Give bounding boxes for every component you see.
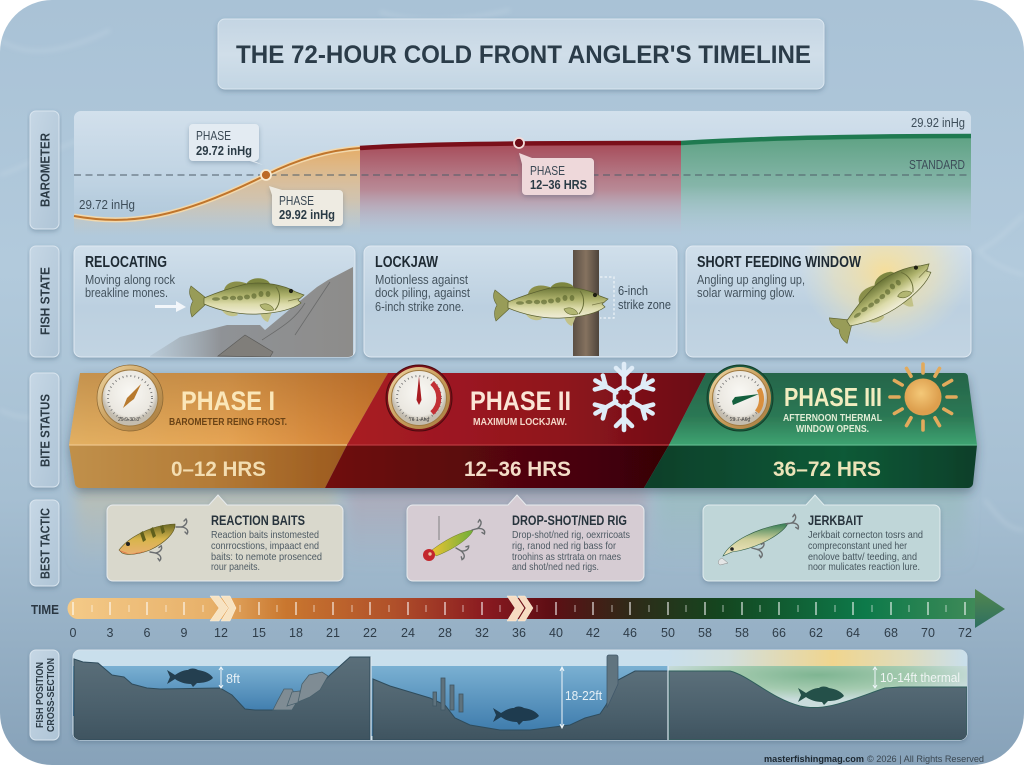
time label: TIME bbox=[31, 602, 59, 617]
title: THE 72-HOUR COLD FRONT ANGLER'S TIMELINE bbox=[236, 41, 811, 69]
text block: Angling up angling up, bbox=[697, 272, 805, 287]
text block: troohins as strtrata on rnaes bbox=[512, 551, 621, 563]
duration: phase III: 36–72 HRS bbox=[773, 458, 881, 481]
icon: snowflake bbox=[591, 364, 657, 430]
subtitle: phase III: WINDOW OPENS. bbox=[796, 423, 869, 435]
gauge: phase II bbox=[386, 365, 452, 431]
row label: bite status bbox=[30, 373, 59, 487]
row label: fish state bbox=[30, 246, 59, 357]
segment: phase II bbox=[325, 373, 706, 488]
row label: fish position cross-section bbox=[30, 650, 59, 740]
text block: 6-inch strike zone. bbox=[375, 299, 464, 314]
start reading: 29.72 inHg bbox=[79, 197, 135, 212]
text block: Drop-shot/ned rig, oexrricoats bbox=[512, 529, 630, 541]
gauge: phase I bbox=[97, 365, 163, 431]
solar glow bbox=[814, 246, 956, 334]
icon: sun bbox=[890, 364, 956, 430]
footer credit: masterfishingmag.com bbox=[764, 754, 864, 765]
text block bbox=[375, 272, 470, 314]
text block: breakline mones. bbox=[85, 285, 168, 300]
heading: REACTION BAITS bbox=[211, 513, 305, 528]
icon: drop-shot lure bbox=[423, 516, 485, 561]
time scale numbers: 42 bbox=[586, 626, 600, 640]
heading: phase I: PHASE I bbox=[181, 386, 275, 416]
phase III fill bbox=[681, 136, 971, 236]
phase I fill bbox=[74, 148, 360, 236]
icon: jerkbait lure bbox=[718, 514, 799, 565]
time scale numbers: 28 bbox=[438, 626, 452, 640]
time scale numbers: 40 bbox=[549, 626, 563, 640]
marker: lockjaw point bbox=[514, 138, 524, 148]
time scale numbers: 32 bbox=[475, 626, 489, 640]
terrain: section 3 bbox=[669, 671, 967, 740]
strike zone label: 6-inch bbox=[618, 283, 648, 298]
text block: enolove battv/ teeding, and bbox=[808, 551, 917, 563]
icon: crankbait lure bbox=[119, 519, 188, 561]
terrain: section 2 bbox=[373, 671, 668, 740]
fish: relocating bass bbox=[190, 278, 304, 322]
standard dashed line bbox=[74, 174, 971, 176]
footer credit: © 2026 | All Rights Reserved bbox=[867, 754, 984, 765]
depth: 10-14ft thermal bbox=[873, 667, 960, 688]
heading: SHORT FEEDING WINDOW bbox=[697, 254, 861, 271]
arrow: movement bbox=[155, 301, 186, 312]
card: reaction baits bbox=[107, 495, 343, 581]
time scale numbers bbox=[70, 626, 972, 640]
subtitle: phase III: AFTERNOON THERMAL bbox=[783, 412, 882, 424]
depth: 10-14ft thermal: 10-14ft thermal bbox=[880, 671, 960, 685]
duration: phase II: 12–36 HRS bbox=[464, 458, 571, 481]
text block bbox=[211, 529, 322, 573]
duration: phase I: 0–12 HRS bbox=[171, 458, 266, 481]
panel: relocating bbox=[74, 246, 355, 357]
text block bbox=[85, 272, 175, 300]
time scale numbers: 36 bbox=[512, 626, 526, 640]
heading: phase II: PHASE II bbox=[470, 386, 571, 416]
card: jerkbait bbox=[703, 495, 940, 581]
callout: 29.92: 29.92 inHg bbox=[279, 207, 335, 222]
gauge: phase I: 29.9-30.3 bbox=[118, 417, 139, 423]
text block: and shot/ned ned rigs. bbox=[512, 561, 599, 573]
dock piling bbox=[573, 250, 599, 356]
arrow: time axis bbox=[68, 589, 1005, 628]
time scale numbers: 0 bbox=[70, 626, 77, 640]
heading: RELOCATING bbox=[85, 254, 167, 271]
sky glow bbox=[669, 650, 967, 666]
rocks bbox=[273, 672, 328, 710]
time scale numbers: 70 bbox=[921, 626, 935, 640]
time scale numbers: 68 bbox=[884, 626, 898, 640]
water bbox=[73, 666, 339, 716]
dock post bbox=[607, 655, 618, 708]
heading: DROP-SHOT/NED RIG bbox=[512, 513, 627, 528]
text block: noor mulicates reaction lure. bbox=[808, 561, 920, 573]
time scale numbers: 18 bbox=[289, 626, 303, 640]
time scale numbers: 66 bbox=[772, 626, 786, 640]
gauge: phase III bbox=[707, 365, 773, 431]
panel: lake cross-section bbox=[73, 650, 967, 740]
tactic column tints bbox=[76, 486, 966, 568]
text block: dock piling, against bbox=[375, 285, 470, 300]
row label: fish state: FISH STATE bbox=[38, 267, 52, 335]
text block bbox=[697, 272, 805, 300]
row label: best tactic bbox=[30, 500, 59, 586]
time scale numbers: 72 bbox=[958, 626, 972, 640]
text block bbox=[808, 529, 923, 573]
fish: lockjaw bass bbox=[494, 282, 608, 326]
text block: conrrocstions, impaact end bbox=[211, 540, 319, 552]
time scale numbers: 46 bbox=[623, 626, 637, 640]
panel: lockjaw bbox=[364, 246, 677, 357]
depth: 18-22ft: 18-22ft bbox=[565, 689, 602, 703]
row label: best tactic: BEST TACTIC bbox=[38, 507, 52, 579]
text block: rig, ranod ned rig bass for bbox=[512, 540, 616, 552]
callout: 12-36 hrs bbox=[519, 153, 594, 195]
pressure curve bbox=[74, 136, 971, 220]
heading: phase III: PHASE III bbox=[784, 382, 882, 412]
phase II fill bbox=[360, 143, 681, 236]
callout: 29.92: PHASE bbox=[279, 194, 314, 208]
decorative water caustics bbox=[0, 10, 1024, 530]
text block: Moving along rock bbox=[85, 272, 175, 287]
time scale numbers: 21 bbox=[326, 626, 340, 640]
time scale numbers: 6 bbox=[144, 626, 151, 640]
row label: barometer: BAROMETER bbox=[38, 132, 52, 207]
text block: Reaction baits instomested bbox=[211, 529, 319, 541]
text block: baits: to nemote prosenced bbox=[211, 551, 322, 563]
text block: rour paneits. bbox=[211, 561, 260, 573]
card: drop-shot bbox=[407, 495, 644, 581]
phase bar bbox=[69, 364, 977, 488]
time scale numbers: 9 bbox=[181, 626, 188, 640]
time scale numbers: 64 bbox=[846, 626, 860, 640]
time scale numbers: 62 bbox=[809, 626, 823, 640]
fish silhouette: deep bbox=[493, 706, 539, 725]
marker: rising point bbox=[261, 170, 271, 180]
fish silhouette: shallow bbox=[167, 668, 213, 687]
segment: phase III bbox=[644, 373, 977, 488]
chevrons at hour 36 bbox=[507, 596, 533, 621]
strike zone box bbox=[600, 277, 614, 318]
time scale numbers: 12 bbox=[214, 626, 228, 640]
panel: short feeding window bbox=[684, 246, 974, 362]
depth: 8ft bbox=[219, 667, 241, 688]
subtitle: phase I: BAROMETER REING FROST. bbox=[169, 416, 287, 428]
time scale numbers: 58 bbox=[735, 626, 749, 640]
segment: phase I bbox=[69, 373, 388, 488]
fish: feeding bass bbox=[824, 250, 944, 349]
barometer chart bbox=[74, 111, 971, 236]
text block: compreconstant uned her bbox=[808, 540, 907, 552]
row label: bite status: BITE STATUS bbox=[38, 394, 52, 467]
callout: 29.72: 29.72 inHg bbox=[196, 143, 252, 158]
row label: fish position cross-section: CROSS-SECTION bbox=[46, 658, 57, 732]
subtitle: phase II: MAXIMUM LOCKJAW. bbox=[473, 416, 567, 428]
end reading: 29.92 inHg bbox=[911, 115, 965, 130]
heading: JERKBAIT bbox=[808, 513, 864, 528]
time scale numbers: 24 bbox=[401, 626, 415, 640]
time scale numbers: 22 bbox=[363, 626, 377, 640]
callout: 12-36 hrs: PHASE bbox=[530, 164, 565, 178]
depth: 18-22ft bbox=[560, 667, 602, 728]
callout: 29.72: PHASE bbox=[196, 129, 231, 143]
callout: 12-36 hrs: 12–36 HRS bbox=[530, 177, 587, 192]
depth: 8ft: 8ft bbox=[226, 672, 241, 686]
gauge: phase II: 76 1-Ahg bbox=[409, 417, 430, 423]
rocks bbox=[150, 267, 353, 357]
time scale numbers: 50 bbox=[661, 626, 675, 640]
dividers bbox=[371, 657, 668, 740]
strike zone label: strike zone bbox=[618, 297, 671, 312]
row label: barometer bbox=[30, 111, 59, 229]
text block: Motionless against bbox=[375, 272, 468, 287]
time scale numbers: 58 bbox=[698, 626, 712, 640]
subtitle: phase III bbox=[783, 412, 882, 435]
time scale numbers: 3 bbox=[107, 626, 114, 640]
fish silhouette: thermal bbox=[798, 686, 844, 705]
ticks bbox=[73, 602, 965, 615]
submerged pilings bbox=[433, 678, 463, 712]
title bbox=[218, 19, 824, 89]
callout: 29.72 bbox=[189, 124, 263, 165]
terrain: section 1 bbox=[74, 657, 370, 740]
strike zone label bbox=[618, 283, 671, 312]
time scale numbers: 15 bbox=[252, 626, 266, 640]
heading: LOCKJAW bbox=[375, 254, 438, 271]
row label: fish position cross-section: FISH POSITION bbox=[35, 662, 46, 728]
gauge: phase III: 29.7-A0g bbox=[730, 417, 751, 423]
text block: Jerkbait cornecton tosrs and bbox=[808, 529, 923, 541]
text block: solar warming glow. bbox=[697, 285, 795, 300]
chevrons at hour 12 bbox=[210, 596, 236, 621]
callout: 29.92 bbox=[269, 186, 343, 226]
text block bbox=[512, 529, 630, 573]
footer credit bbox=[764, 754, 984, 765]
standard label: STANDARD bbox=[909, 158, 965, 172]
